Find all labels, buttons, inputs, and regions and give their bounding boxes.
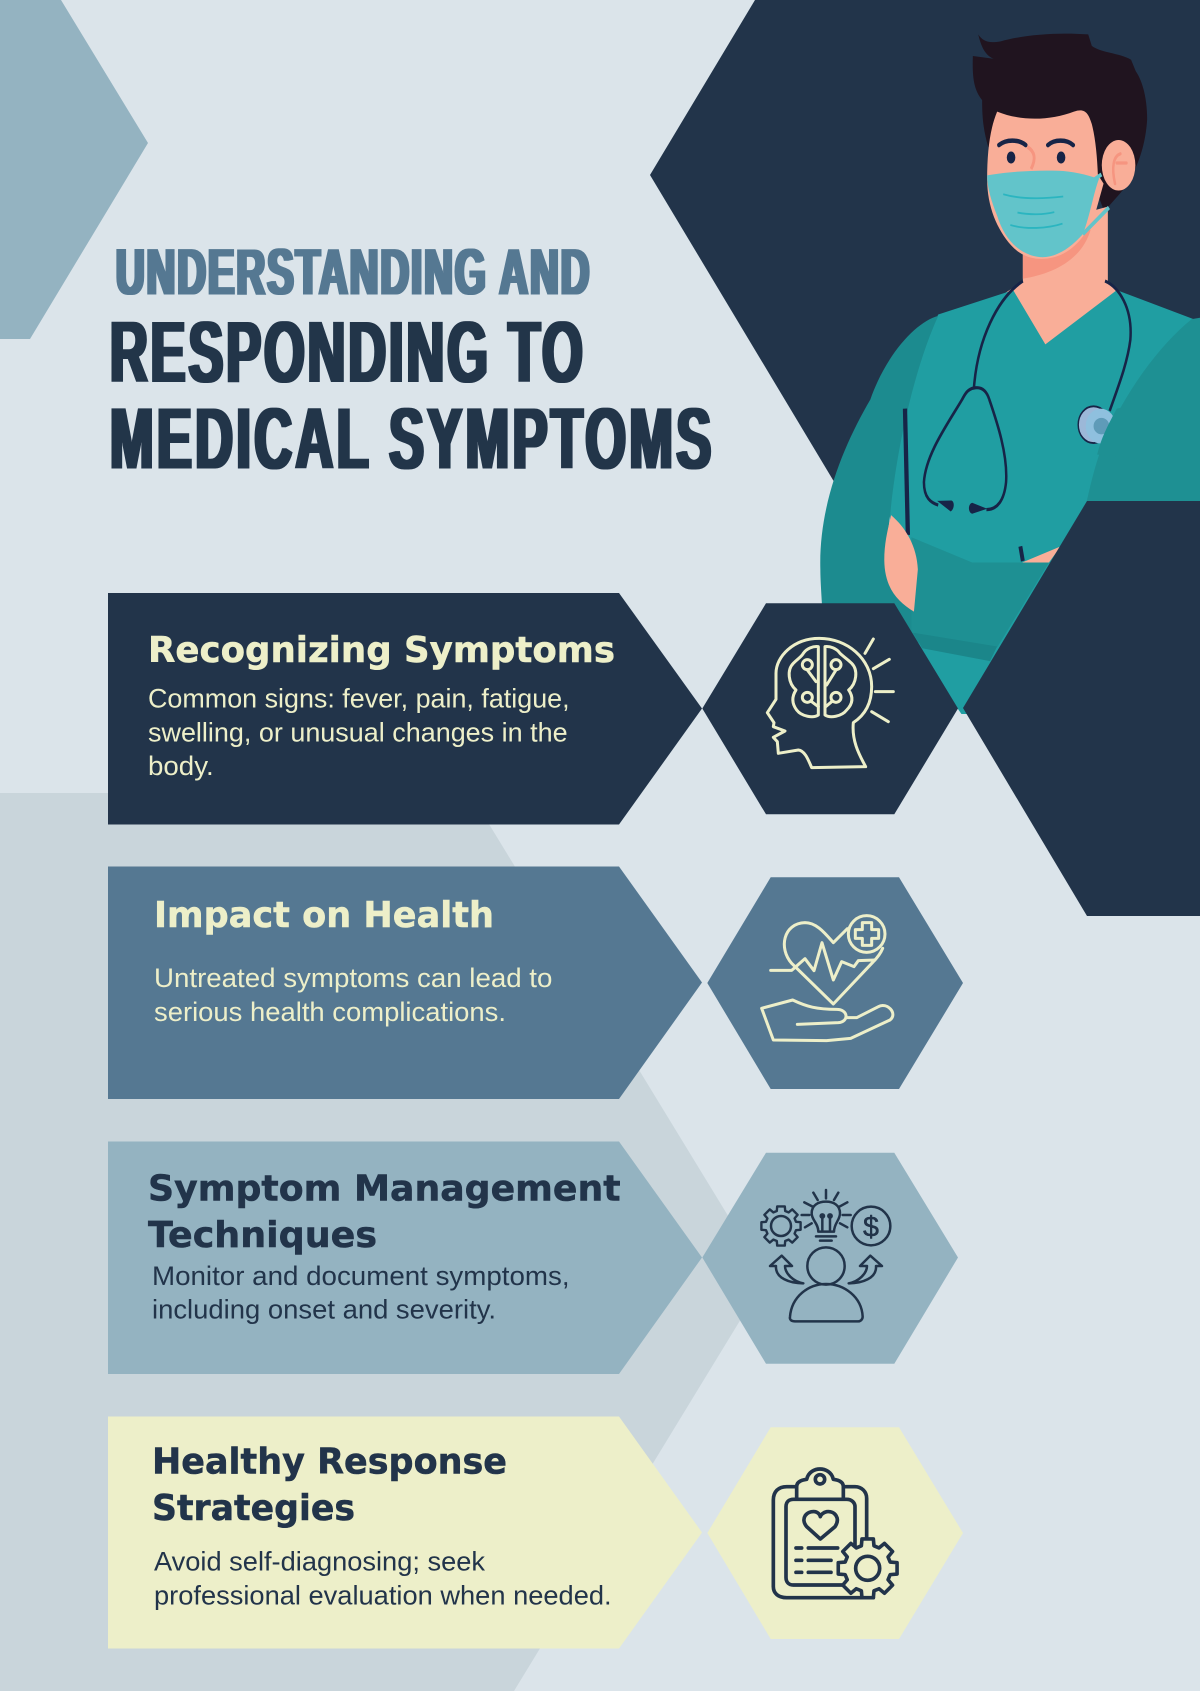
background shape: large dark hexagon top right (650, 0, 1200, 510)
illustration: doctor with mask and stethoscope (820, 34, 1200, 714)
left sleeve (820, 316, 938, 643)
body text: Avoid self-diagnosing; seek (154, 1547, 485, 1577)
heading: Symptom Management (148, 1169, 621, 1210)
icon: person with gear, bulb and dollar (761, 1190, 890, 1321)
heading: Recognizing Symptoms (148, 630, 615, 671)
body text: Common signs: fever, pain, fatigue, (148, 683, 570, 713)
title line 1: UNDERSTANDING AND (116, 235, 589, 309)
heading: Healthy Response (152, 1442, 507, 1483)
doctor neck (997, 207, 1122, 349)
hexagon: clipboard icon badge (707, 1427, 963, 1639)
hand (884, 515, 918, 612)
icon: person with gear, bulb and dollar: $ (863, 1211, 879, 1243)
body text: swelling, or unusual changes in the (148, 718, 568, 748)
title line 2: RESPONDING TO (110, 304, 583, 401)
body text: body. (148, 751, 214, 781)
body text (154, 1547, 612, 1610)
hexagon: ideas icon badge (702, 1153, 958, 1364)
right sleeve (1086, 318, 1200, 503)
heading: Impact on Health (154, 895, 494, 936)
background shape: lower left hexagon (0, 793, 766, 1691)
heading (152, 1442, 507, 1529)
body text (148, 683, 570, 781)
body text (152, 1261, 570, 1325)
card shape (108, 1142, 702, 1374)
panel: symptom management techniques (108, 1142, 702, 1374)
forearm stripe (913, 633, 997, 661)
hexagon: heart icon badge (707, 877, 963, 1089)
icon: head with brain (767, 638, 893, 768)
stethoscope (924, 281, 1140, 514)
card shape (108, 866, 702, 1099)
title (110, 235, 711, 488)
icon: heart in hand (762, 916, 893, 1041)
panel: recognizing symptoms (108, 593, 702, 824)
panel: impact on health (108, 866, 702, 1099)
body text: serious health complications. (154, 997, 506, 1027)
hexagon: brain icon badge (702, 603, 958, 814)
heading: Strategies (152, 1488, 355, 1529)
face (987, 110, 1104, 259)
background shape: top left hexagon (0, 0, 148, 339)
body text: Monitor and document symptoms, (152, 1261, 570, 1291)
doctor hair (973, 34, 1147, 211)
ear (1102, 140, 1135, 191)
icon: clipboard with heart and gear (773, 1469, 897, 1598)
panel: healthy response strategies (108, 1416, 702, 1648)
waist line (1020, 546, 1023, 561)
body text (154, 963, 552, 1027)
folded forearm (911, 537, 1049, 647)
background shape: lower dark hexagon right (963, 501, 1200, 916)
neck shadow (1023, 230, 1091, 279)
body text: professional evaluation when needed. (154, 1580, 612, 1610)
heading (148, 1169, 621, 1256)
title line 3: MEDICAL SYMPTOMS (110, 391, 711, 488)
pocket line (905, 409, 908, 535)
waist skin (1022, 546, 1061, 562)
eyes and eyebrows (999, 141, 1073, 169)
heading: Techniques (148, 1215, 377, 1256)
card shape (108, 593, 702, 824)
face mask (987, 171, 1109, 257)
scrubs torso (890, 290, 1200, 714)
card shape (108, 1416, 702, 1648)
body text: including onset and severity. (152, 1295, 496, 1325)
body text: Untreated symptoms can lead to (154, 963, 552, 993)
